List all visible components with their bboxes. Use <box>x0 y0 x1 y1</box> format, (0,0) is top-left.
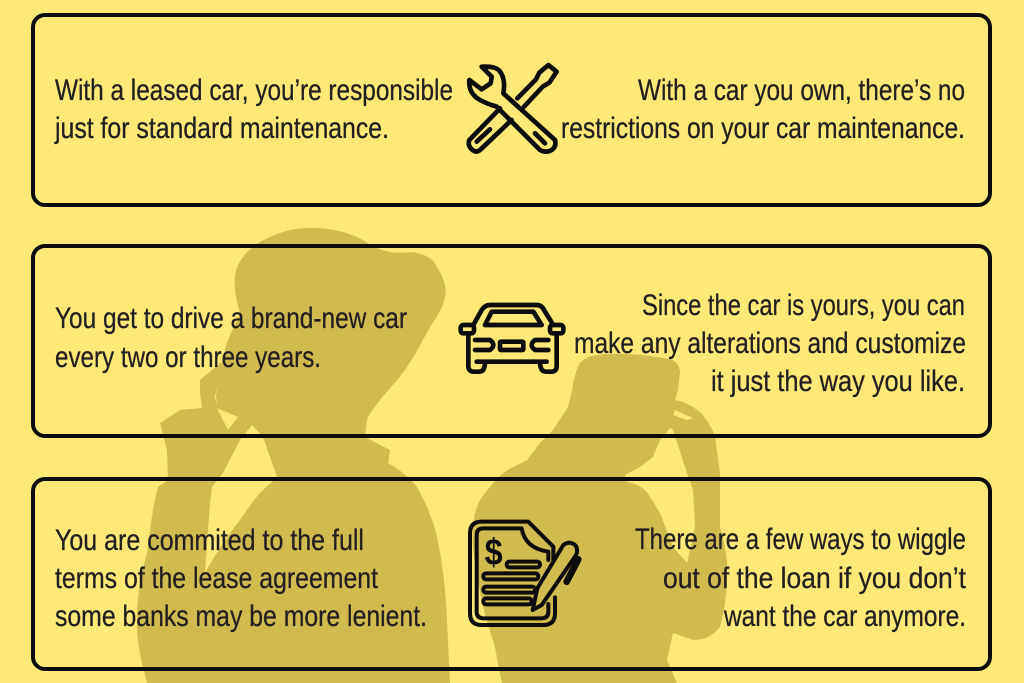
left text: new car: every two or three years. <box>55 341 321 374</box>
left text: lease terms: terms of the lease agreement <box>55 562 379 595</box>
silhouette: person on phone (left) <box>137 228 450 683</box>
left text: lease terms: You are commited to the full <box>55 524 364 557</box>
silhouette: person on phone (right) <box>473 354 727 683</box>
left text: new car: You get to drive a brand-new car <box>55 302 407 335</box>
left text: leased maintenance <box>54 74 453 145</box>
right text: getting out of the loan: out of the loan if you don’t <box>663 562 967 595</box>
panel: driving a new car <box>33 246 990 436</box>
right text: getting out of the loan <box>635 523 967 633</box>
icon: loan document and pen: $ <box>485 532 503 573</box>
panel: contract terms <box>33 479 990 669</box>
left text: new car <box>55 302 407 374</box>
icon: wrench and screwdriver <box>469 65 557 152</box>
right text: getting out of the loan: want the car anymore. <box>723 600 966 633</box>
icon: car front <box>461 305 563 372</box>
right text: customization: it just the way you like. <box>711 365 965 398</box>
icon: loan document and pen <box>470 522 578 625</box>
left text: lease terms <box>55 524 427 633</box>
left text: leased maintenance: just for standard maintenance. <box>54 112 389 145</box>
right text: owned maintenance <box>561 74 965 145</box>
right text: customization <box>574 289 966 398</box>
left text: lease terms: some banks may be more lenient. <box>55 600 427 633</box>
left text: leased maintenance: With a leased car, you’re responsible <box>55 74 453 107</box>
panel: maintenance <box>33 15 990 205</box>
